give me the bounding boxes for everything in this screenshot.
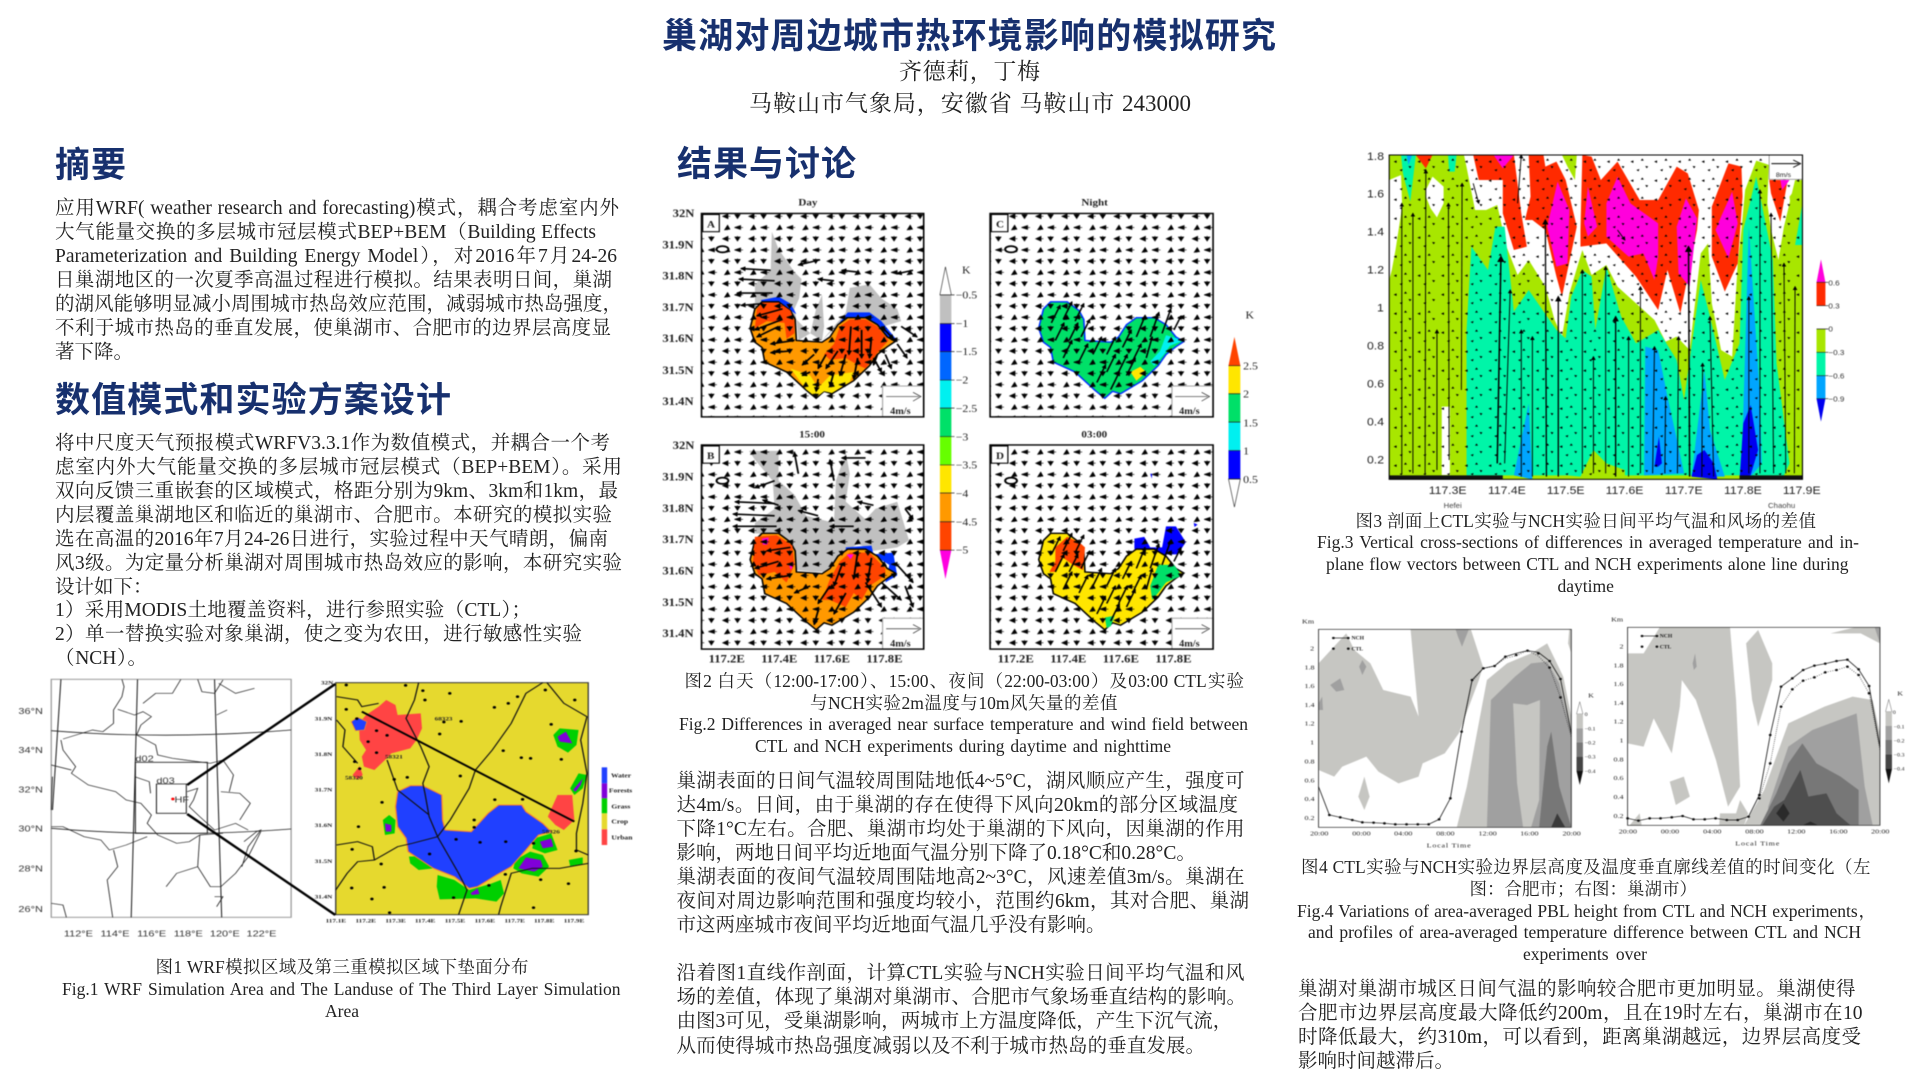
caption: figure 1 — [62, 956, 620, 1020]
map: nested domains: 118°E — [174, 930, 203, 939]
colour bar: nighttime difference: 1 — [1243, 446, 1249, 457]
panel A: daytime mean: A — [707, 220, 716, 230]
map: land use of third domain: 58320 — [345, 775, 363, 781]
colour bar: nighttime difference: K — [1245, 310, 1254, 322]
axis labels: figure 3: 117.6E — [1606, 485, 1644, 497]
panel: Chaohu: 0.2 — [1614, 812, 1624, 820]
colour bar: daytime difference: K — [962, 265, 971, 276]
axis labels: figure 3 — [1367, 151, 1821, 497]
text block: PBL height conclusions — [1298, 978, 1862, 1072]
panel: Chaohu: 1.6 — [1614, 680, 1624, 688]
caption: figure 2 — [679, 671, 1248, 756]
panel B: 15:00: 4m/s — [890, 639, 911, 649]
legend: land use: Crop — [611, 819, 628, 825]
text block: daytime and nighttime results: 下降1°C左右。合肥、巢湖市均处于巢湖的下风向，因巢湖的作用 — [676, 819, 1244, 840]
panel: Chaohu: 0.8 — [1614, 755, 1624, 763]
vector scale box: 8m/s — [1776, 172, 1792, 179]
colour bar: Chaohu: −0.3 — [1894, 753, 1905, 758]
axis labels: figure 3: 0.8 — [1367, 340, 1384, 353]
text block: daytime and nighttime results — [676, 770, 1249, 936]
map: land use of third domain: 117.6E — [475, 918, 495, 924]
text block: abstract: Parameterization and Building Energy Model），对2016年7月24-26 — [55, 246, 617, 267]
axis labels: figure 3: 1.2 — [1367, 264, 1384, 276]
legend: land use: Water — [611, 773, 631, 779]
panel D: 03:00: D — [996, 451, 1004, 462]
map: nested domains: 112°E — [64, 930, 93, 939]
panel: Chaohu: 20:00 — [1619, 827, 1637, 835]
location labels: Chaohu — [1768, 501, 1795, 510]
map: nested domains: d03 — [156, 776, 175, 786]
caption: figure 3: 图3 剖面上CTL实验与NCH实验日间平均气温和风场的差值 — [1356, 511, 1816, 531]
caption: figure 4: experiments over — [1523, 944, 1647, 964]
colour bar: nighttime difference: 1.5 — [1243, 418, 1258, 429]
map: land use of third domain: 117.7E — [504, 918, 525, 924]
text block: PBL height conclusions: 合肥市边界层高度最大降低约200m，且在19时左右，巢湖市在10 — [1298, 1003, 1862, 1024]
axis labels: figure 2: 31.7N — [662, 301, 694, 314]
axis labels: figure 3: 117.3E — [1429, 485, 1467, 497]
panel: Hefei: 0.2 — [1304, 814, 1315, 822]
title: 巢湖对周边城市热环境影响的模拟研究 — [662, 17, 1276, 56]
panel: Chaohu: 16:00 — [1829, 827, 1848, 835]
map: land use of third domain: 31.4N — [315, 894, 333, 900]
text block: daytime and nighttime results: 市这两座城市夜间平均近地面气温几乎没有影响。 — [676, 915, 1106, 936]
axis labels: figure 3: 117.4E — [1488, 485, 1526, 497]
caption: figure 2: 与NCH实验2m温度与10m风矢量的差值 — [810, 693, 1118, 713]
map: land use of third domain: 31.6N — [315, 823, 333, 829]
authors: 齐德莉，丁梅 — [899, 59, 1040, 84]
panel: Hefei: 2 — [1310, 644, 1314, 652]
axis labels: figure 3: 117.5E — [1547, 485, 1585, 497]
colour bar: Hefei: −0.4 — [1585, 769, 1596, 775]
axis labels: figure 2: 117.8E — [1155, 652, 1192, 665]
colour bar: Chaohu — [1886, 689, 1905, 783]
axis labels: figure 2: 31.8N — [662, 502, 694, 515]
text block: cross-section results: 由图3可见，受巢湖影响，两城市上方温度降低，产生下沉气流， — [676, 1011, 1232, 1032]
axis labels: figure 2: 31.7N — [662, 533, 694, 546]
text block: daytime and nighttime results: 巢湖表面的夜间气温较周围陆地高2~3°C，风速差值3m/s。巢湖在 — [676, 867, 1244, 888]
heading: model and experiment design: 数值模式和实验方案设计 — [55, 380, 451, 420]
text block: model and experiment design: 双向反馈三重嵌套的区域模式，格距分别为9km、3km和1km，最 — [55, 481, 618, 502]
map: land use of third domain: 117.9E — [564, 918, 584, 924]
panel D: 03:00 — [990, 430, 1213, 649]
map: land use of third domain: 117.8E — [534, 918, 554, 924]
panel B: 15:00: B — [707, 451, 714, 462]
panel: Chaohu: 12:00 — [1787, 827, 1806, 835]
text block: cross-section results — [676, 962, 1246, 1057]
axis labels: figure 3: 117.8E — [1724, 485, 1762, 497]
colour bar: daytime difference: −2.5 — [956, 404, 978, 415]
panel C: nighttime mean: Night — [1081, 198, 1108, 208]
map: nested domains — [18, 679, 291, 939]
panel C: nighttime mean — [990, 198, 1213, 417]
colour bar: cross-section: 0.6 — [1828, 279, 1840, 287]
colour bar: Hefei: 0 — [1585, 712, 1588, 718]
colour bar: Hefei: −0.3 — [1585, 755, 1596, 760]
panel: Hefei — [1302, 617, 1581, 849]
heading: results and discussion: 结果与讨论 — [677, 144, 856, 184]
colour bar: Hefei: K — [1588, 691, 1595, 699]
colour bar: daytime difference: −3 — [956, 432, 969, 443]
axis labels: figure 3: 0.4 — [1367, 416, 1385, 429]
map: nested domains: 116°E — [137, 930, 167, 939]
caption: figure 1: Area — [325, 1000, 359, 1020]
text block: PBL height conclusions: 影响时间越滞后。 — [1298, 1051, 1454, 1072]
caption: figure 3 — [1317, 511, 1859, 596]
text block: model and experiment design: 内层覆盖巢湖地区和临近的巢湖市、合肥市。本研究的模拟实验 — [55, 505, 612, 526]
panel: Chaohu: Km — [1611, 615, 1623, 623]
map: land use of third domain: 32N — [321, 680, 334, 686]
axis labels: figure 2: 117.6E — [814, 652, 850, 665]
caption: figure 3: plane flow vectors between CTL and NCH experiments alone line during — [1326, 554, 1848, 574]
colour bar: nighttime difference — [1228, 310, 1258, 507]
axis labels: figure 2: 31.9N — [662, 470, 694, 484]
panel: Hefei: 20:00 — [1562, 829, 1581, 837]
panel B: 15:00 — [702, 430, 924, 649]
panel: Hefei: 08:00 — [1436, 829, 1455, 837]
axis labels: figure 2: 31.9N — [662, 238, 694, 251]
axis labels: figure 2: 117.2E — [709, 652, 745, 665]
axis labels: figure 2: 117.4E — [1050, 652, 1086, 665]
text block: model and experiment design: （NCH）。 — [55, 648, 147, 669]
caption: figure 3: daytime — [1558, 576, 1614, 596]
caption: figure 4: 图4 CTL实验与NCH实验边界层高度及温度垂直廓线差值的时间变化（左 — [1301, 857, 1870, 877]
colour bar: daytime difference: −5 — [956, 545, 969, 557]
map: land use of third domain: 31.8N — [315, 752, 333, 758]
panel: Chaohu: 0.6 — [1614, 774, 1624, 782]
text block: cross-section results: 沿着图1直线作剖面，计算CTL实验与NCH实验日间平均气温和风 — [676, 963, 1244, 984]
panel: Hefei: 0.4 — [1304, 795, 1315, 803]
figure 4: PBL height and temperature profile time series — [1302, 615, 1905, 849]
caption: figure 4: and profiles of area-averaged temperature difference between CTL and NCH — [1308, 922, 1861, 942]
axis labels: figure 3: 117.9E — [1783, 485, 1821, 497]
axis labels: figure 3: 117.7E — [1665, 485, 1703, 497]
map: land use of third domain: 31.7N — [315, 787, 333, 793]
axis labels: figure 3: 0.2 — [1367, 454, 1384, 466]
text block: model and experiment design — [55, 432, 622, 669]
panel: Chaohu: 04:00 — [1703, 827, 1722, 835]
vector scale box — [1769, 155, 1802, 179]
map: land use of third domain: 58326 — [542, 829, 561, 835]
map: land use of third domain: 117.5E — [445, 918, 465, 924]
text block: abstract: 的湖风能够明显减小周围城市热岛效应范围，减弱城市热岛强度， — [55, 294, 622, 315]
map: nested domains: 114°E — [100, 930, 130, 939]
colour bar: cross-section: −0.9 — [1828, 395, 1844, 403]
panel: Hefei: 12:00 — [1478, 829, 1497, 837]
panel: Hefei: 0.8 — [1304, 757, 1315, 765]
panel B: 15:00: 15:00 — [799, 430, 825, 440]
cross-section flow vectors — [1389, 155, 1802, 477]
panel: Chaohu: 1.4 — [1614, 699, 1624, 707]
map: land use of third domain: 117.4E — [415, 918, 435, 924]
axis labels: figure 2: 31.6N — [662, 564, 694, 578]
panel: Hefei: 00:00 — [1352, 829, 1371, 837]
text block: cross-section results: 从而使得城市热岛强度减弱以及不利于城市热岛的垂直发展。 — [676, 1036, 1205, 1057]
caption: figure 1: Fig.1 WRF Simulation Area and The Landuse of The Third Layer Simulation — [62, 978, 620, 998]
colour bar: cross-section — [1817, 259, 1844, 422]
location labels — [1444, 501, 1795, 510]
panel: Chaohu: 1.2 — [1614, 717, 1624, 725]
panel: Hefei: 0.6 — [1304, 776, 1315, 784]
connector lines and section line — [187, 684, 574, 915]
map: land use of third domain: 117.1E — [326, 918, 346, 924]
axis labels: figure 2: 31.4N — [662, 627, 694, 640]
axis labels: figure 2: 31.6N — [662, 332, 694, 345]
colour bar: daytime difference: −3.5 — [956, 460, 978, 471]
panel: Chaohu: CTL — [1660, 645, 1672, 650]
map: nested domains: 34°N — [18, 746, 43, 756]
panel: Chaohu: 2 — [1620, 642, 1624, 650]
colour bar: Hefei: −0.2 — [1585, 741, 1596, 746]
text block: abstract: 不利于城市热岛的垂直发展，使巢湖市、合肥市的边界层高度显 — [55, 318, 611, 339]
caption: figure 4 — [1297, 857, 1876, 964]
panel C: nighttime mean: 4m/s — [1179, 407, 1200, 417]
panel: Hefei: CTL — [1351, 647, 1364, 652]
panel: Hefei: Km — [1302, 617, 1314, 625]
panel: Hefei: NCH — [1351, 636, 1364, 641]
text block: model and experiment design: 风3级。为定量分析巢湖对周围城市热岛效应的影响，本研究实验 — [55, 553, 622, 574]
text block: model and experiment design: 将中尺度天气预报模式WRFV3.3.1作为数值模式，并耦合一个考 — [55, 433, 610, 454]
caption: figure 3: Fig.3 Vertical cross-sections of differences in averaged temperature and in- — [1317, 532, 1859, 552]
colour bar: Chaohu: 0 — [1893, 710, 1896, 716]
map: land use of third domain: 31.5N — [315, 859, 333, 865]
map: nested domains: 30°N — [18, 825, 43, 834]
panel: Chaohu: 1 — [1620, 736, 1624, 744]
panel: Hefei: 20:00 — [1310, 829, 1329, 837]
panel D: 03:00: 03:00 — [1081, 430, 1107, 440]
axis labels: figure 2: 117.8E — [866, 652, 903, 665]
map: nested domains: 28°N — [18, 865, 43, 874]
location labels: Hefei — [1444, 501, 1462, 510]
text block: cross-section results: 场的差值，体现了巢湖对巢湖市、合肥市气象场垂直结构的影响。 — [676, 987, 1246, 1008]
axis labels: figure 2: 117.6E — [1103, 652, 1139, 665]
panel A: daytime mean: 4m/s — [890, 407, 911, 417]
legend: land use: Urban — [611, 835, 633, 841]
text block: abstract: 著下降。 — [55, 342, 133, 363]
panel A: daytime mean — [702, 198, 924, 417]
text block: model and experiment design: 1）采用MODIS土地覆盖资料，进行参照实验（CTL）； — [55, 600, 531, 621]
panel: Chaohu: 0.4 — [1614, 793, 1624, 801]
colour bar: daytime difference: −1 — [956, 319, 968, 330]
map: nested domains: 122°E — [247, 930, 277, 939]
colour bar: nighttime difference: 2.5 — [1243, 361, 1258, 372]
colour bar: daytime difference — [940, 265, 978, 579]
panel: Hefei: 1.4 — [1304, 701, 1315, 709]
axis labels: figure 2: 117.4E — [761, 652, 797, 665]
cross-section contour fields — [1389, 155, 1802, 479]
panel: Chaohu: 08:00 — [1745, 827, 1764, 835]
panel: Hefei: 1.6 — [1304, 682, 1315, 690]
caption: figure 4: Fig.4 Variations of area-averaged PBL height from CTL and NCH experiments， — [1297, 900, 1876, 920]
colour bar: daytime difference: −4 — [956, 489, 969, 500]
colour bar: Chaohu: −0.2 — [1894, 739, 1905, 744]
map: nested domains: 36°N — [18, 707, 43, 717]
text block: model and experiment design: 设计如下： — [55, 577, 153, 598]
panel C: nighttime mean: C — [996, 220, 1004, 230]
text block: model and experiment design: 选在高温的2016年7月24-26日进行，实验过程中天气晴朗，偏南 — [55, 529, 608, 550]
colour bar: nighttime difference: 0.5 — [1243, 474, 1258, 486]
axis labels: figure 2: 31.8N — [662, 269, 694, 283]
map: nested domains: 32°N — [18, 785, 43, 795]
panel: Chaohu — [1611, 615, 1890, 847]
colour bar: Chaohu: K — [1897, 689, 1904, 697]
map: land use of third domain: 117.3E — [385, 918, 406, 924]
panel: Chaohu: 20:00 — [1871, 827, 1890, 835]
caption: figure 2: CTL and NCH experiments during daytime and nighttime — [755, 736, 1171, 756]
legend: land use: Grass — [611, 804, 631, 810]
figure 1: simulation domain and land use maps — [18, 678, 633, 939]
axis labels: figure 2: 31.4N — [662, 395, 694, 408]
axis labels: figure 2: 32N — [673, 439, 695, 452]
caption: figure 2: Fig.2 Differences in averaged near surface temperature and wind field between — [679, 714, 1248, 734]
panel: Chaohu: 1.8 — [1614, 661, 1624, 669]
text block: model and experiment design: 虑室内外大气能量交换的多层城市冠层模式（BEP+BEM）。采用 — [55, 457, 622, 478]
text block: abstract: 应用WRF( weather research and forecasting)模式，耦合考虑室内外 — [55, 198, 619, 219]
axis labels: figure 2: 31.5N — [662, 596, 694, 609]
map: land use of third domain: 117.2E — [356, 918, 376, 924]
axis labels: figure 3: 1.6 — [1367, 188, 1384, 200]
colour bar: cross-section: −0.6 — [1828, 372, 1844, 380]
colour bar: Hefei — [1577, 691, 1596, 785]
affiliation: 马鞍山市气象局，安徽省 马鞍山市 243000 — [749, 90, 1191, 116]
text block: daytime and nighttime results: 巢湖表面的日间气温较周围陆地低4~5°C，湖风顺应产生，强度可 — [676, 771, 1244, 792]
colour bar: cross-section: 0.3 — [1828, 302, 1840, 310]
legend: land use — [602, 767, 633, 845]
map: nested domains: HF — [175, 795, 189, 805]
colour bar: daytime difference: −4.5 — [956, 517, 978, 528]
axis labels: figure 2: 31.5N — [662, 363, 694, 377]
caption: figure 4: 图：合肥市；右图：巢湖市） — [1470, 879, 1697, 899]
axis labels: figure 2 — [662, 207, 1192, 665]
caption: figure 1: 图1 WRF模拟区域及第三重模拟区域下垫面分布 — [156, 956, 528, 976]
text block: daytime and nighttime results: 夜间对周边影响范围和强度均较小，范围约6km，其对合肥、巢湖 — [676, 891, 1249, 912]
map: land use of third domain: 58321 — [385, 754, 403, 760]
colour bar: nighttime difference: 2 — [1243, 389, 1249, 400]
colour bar: cross-section: 0 — [1828, 325, 1833, 334]
text block: abstract: 大气能量交换的多层城市冠层模式BEP+BEM（Building Effects — [55, 222, 596, 243]
colour bar: cross-section: −0.3 — [1828, 348, 1844, 357]
legend: land use: Forests — [609, 788, 633, 794]
panel: Hefei: Local Time — [1427, 841, 1471, 849]
axis labels: figure 2: 117.2E — [998, 652, 1034, 665]
panel A: daytime mean: Day — [798, 198, 818, 208]
panel: Chaohu: NCH — [1660, 634, 1672, 639]
axis labels: figure 2: 32N — [673, 207, 695, 220]
map: land use of third domain: 31.9N — [315, 716, 333, 722]
map: nested domains: d02 — [135, 755, 154, 764]
text block: PBL height conclusions: 时降低最大，约310m，可以看到，距离巢湖越远，边界层高度受 — [1298, 1027, 1861, 1048]
axis labels: figure 3: 0.6 — [1367, 378, 1384, 390]
text block: abstract: 日巢湖地区的一次夏季高温过程进行模拟。结果表明日间，巢湖 — [55, 270, 612, 291]
text block: daytime and nighttime results: 达4m/s。日间，由于巢湖的存在使得下风向20km的部分区域温度 — [676, 795, 1238, 816]
caption: figure 2: 图2 白天（12:00-17:00）、15:00、夜间（22:00-03:00）及03:00 CTL实验 — [684, 671, 1244, 691]
map: land use of third domain: 68323 — [435, 716, 452, 722]
heading: abstract: 摘要 — [55, 146, 126, 184]
panel: Hefei: 1.2 — [1304, 719, 1315, 727]
panel: Chaohu: 00:00 — [1661, 827, 1680, 835]
map: nested domains: 120°E — [210, 930, 240, 939]
map: land use of third domain — [315, 680, 588, 924]
panel D: 03:00: 4m/s — [1179, 639, 1200, 649]
panel: Hefei: 04:00 — [1394, 829, 1413, 837]
figure 2: temperature and wind difference maps — [662, 198, 1258, 665]
panel: Hefei: 1.8 — [1304, 663, 1315, 671]
panel: Hefei: 1 — [1310, 738, 1314, 746]
colour bar: Chaohu: −0.1 — [1894, 725, 1905, 730]
colour bar: Hefei: −0.1 — [1585, 727, 1596, 732]
text block: abstract — [55, 197, 622, 363]
figure 3: vertical cross-section — [1366, 151, 1845, 510]
text block: model and experiment design: 2）单一替换实验对象巢湖，使之变为农田，进行敏感性实验 — [55, 624, 582, 645]
colour bar: daytime difference: −1.5 — [956, 347, 978, 358]
map: nested domains: 26°N — [18, 905, 43, 915]
colour bar: daytime difference: −0.5 — [956, 290, 978, 302]
panel: Hefei: 16:00 — [1520, 829, 1539, 837]
text block: PBL height conclusions: 巢湖对巢湖市城区日间气温的影响较合肥市更加明显。巢湖使得 — [1298, 979, 1856, 1000]
axis labels: figure 3: 1.4 — [1367, 226, 1385, 239]
axis labels: figure 3: 1.8 — [1367, 151, 1384, 163]
colour bar: daytime difference: −2 — [956, 375, 968, 386]
text block: daytime and nighttime results: 影响，两地日间平均近地面气温分别下降了0.18°C和0.28°C。 — [676, 843, 1196, 864]
colour bar: Chaohu: −0.4 — [1894, 767, 1905, 772]
axis labels: figure 3: 1 — [1377, 302, 1384, 315]
panel: Chaohu: Local Time — [1735, 839, 1780, 847]
